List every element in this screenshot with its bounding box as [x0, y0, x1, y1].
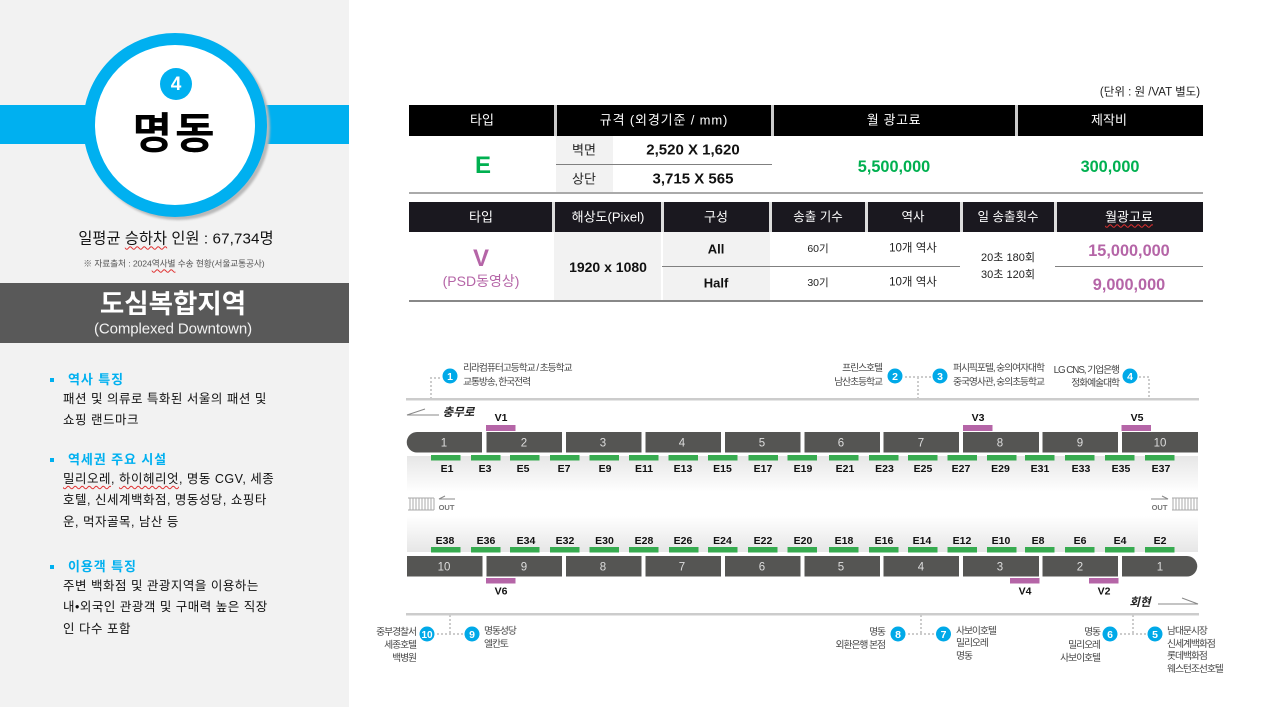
fee all: 15,000,000 — [1088, 242, 1170, 260]
bottom E panels: E14 — [913, 535, 931, 547]
top V panels — [486, 412, 1151, 431]
label cells — [556, 136, 613, 192]
header: size: 규격 (외경기준 / mm) — [600, 112, 728, 128]
OUT sign right — [1151, 496, 1198, 512]
top train doors: 6 — [838, 438, 844, 450]
header dividers — [552, 202, 555, 232]
bullet — [50, 458, 54, 462]
top E panels — [431, 455, 1174, 475]
OUT sign left: OUT — [439, 503, 455, 512]
exit 9 — [464, 625, 517, 650]
bottom train doors: 2 — [1077, 562, 1083, 574]
body text: 내•외국인 관광객 및 구매력 높은 직장 — [63, 600, 268, 614]
bottom train doors: 5 — [838, 562, 844, 574]
top E panels: E37 — [1152, 463, 1170, 475]
top E panels: E15 — [713, 463, 732, 475]
top train doors: 7 — [918, 438, 924, 450]
top train doors: 4 — [679, 438, 686, 450]
exit 8: 명동 — [869, 626, 886, 638]
station circle badge — [83, 33, 267, 217]
header: configuration: 구성 — [704, 210, 728, 224]
top E panels: E27 — [952, 463, 970, 475]
body text: 호텔, 신세계백화점, 명동성당, 쇼핑타 — [63, 493, 267, 507]
top E panels: E33 — [1072, 463, 1090, 475]
header: units: 송출 기수 — [793, 210, 843, 224]
line band — [0, 105, 349, 144]
body text: 주변 백화점 및 관광지역을 이용하는 — [63, 579, 259, 593]
stations all: 10개 역사 — [889, 242, 937, 254]
bottom E panels: E34 — [517, 535, 535, 547]
exit 7: 사보이호텔 — [956, 625, 997, 637]
top V panels: V1 — [495, 412, 508, 424]
monthly fee value: 5,500,000 — [858, 158, 930, 176]
daily plays value — [981, 252, 1035, 281]
exit 10: 세종호텔 — [384, 639, 417, 651]
bullet — [50, 565, 54, 569]
type V note: (PSD동영상) — [443, 273, 519, 289]
All: All — [708, 242, 724, 256]
exit 5: 5 — [1152, 629, 1158, 641]
top V panels: V5 — [1131, 412, 1144, 424]
top E panels: E7 — [558, 463, 571, 475]
exit 6: 밀리오레 — [1068, 639, 1100, 651]
bottom E panels: E24 — [713, 535, 732, 547]
bottom train doors: 8 — [600, 562, 606, 574]
exit 5: 롯데백화점 — [1167, 650, 1207, 662]
bottom train doors: 10 — [438, 562, 450, 574]
exit 5: 남대문시장 — [1167, 625, 1208, 637]
exit 6: 명동 — [1084, 626, 1101, 638]
bottom E panels: E12 — [953, 535, 971, 547]
top E panels: E21 — [836, 463, 854, 475]
bullet — [50, 378, 54, 382]
header: stations: 역사 — [901, 210, 925, 224]
exit 7: 밀리오레 — [956, 637, 988, 649]
top E panels: E17 — [754, 463, 772, 475]
top E panels: E1 — [441, 463, 454, 475]
exit 3: 퍼시픽포텔, 숭의여자대학 — [953, 362, 1045, 374]
production cost value: 300,000 — [1081, 158, 1139, 176]
header bar — [409, 202, 1203, 232]
exit 6 — [1060, 626, 1118, 664]
body text: 인 다수 포함 — [63, 622, 131, 636]
bottom V panels: V2 — [1098, 586, 1111, 598]
exit 9: 9 — [469, 629, 475, 641]
exit 5 — [1148, 625, 1224, 675]
area type title: 도심복합지역 — [100, 289, 246, 319]
exit 1: 리라컴퓨터고등학교 / 초등학교 — [463, 362, 573, 374]
bottom E panels: E22 — [754, 535, 772, 547]
bottom E panels: E8 — [1032, 535, 1045, 547]
top E panels: E19 — [794, 463, 812, 475]
exit 7 — [936, 625, 997, 662]
bottom rule — [409, 300, 1203, 302]
bottom V panels: V6 — [495, 586, 508, 598]
row divider — [662, 266, 960, 267]
exit 8: 외환은행 본점 — [836, 639, 885, 651]
top E panels: E31 — [1031, 463, 1049, 475]
top E panels: E9 — [599, 463, 612, 475]
bottom train doors: 4 — [918, 562, 925, 574]
section: customer traits — [50, 559, 268, 636]
bottom E panels: E36 — [477, 535, 495, 547]
body text: 패션 및 의류로 특화된 서울의 패션 및 — [63, 392, 267, 406]
platform floor shading — [407, 456, 1198, 552]
bottom E panels: E16 — [875, 535, 893, 547]
direction: Hoehyeon — [1129, 596, 1198, 609]
top train doors: 10 — [1154, 438, 1166, 450]
exit 10: 백병원 — [392, 652, 416, 664]
body text: 밀리오레, 하이헤리엇, 명동 CGV, 세종 — [63, 472, 274, 486]
top train doors: 2 — [521, 438, 527, 450]
units half: 30기 — [807, 277, 829, 289]
source note: ※ 자료출처 : 2024역사별 수송 현황(서울교통공사) — [83, 259, 265, 269]
bottom E panels: E10 — [992, 535, 1010, 547]
bottom E panels: E26 — [674, 535, 692, 547]
top E panels: E23 — [875, 463, 894, 475]
bottom E panels: E2 — [1154, 535, 1167, 547]
header: monthly fee: 월광고료 — [1105, 210, 1153, 224]
exit 9: 엘칸토 — [484, 638, 509, 650]
bottom train doors: 7 — [679, 562, 685, 574]
section: station history — [50, 372, 267, 427]
exit 1 — [442, 362, 573, 388]
exit 6: 사보이호텔 — [1060, 652, 1101, 664]
top size: 3,715 X 565 — [653, 170, 733, 188]
bottom train doors — [407, 556, 1197, 576]
top train doors — [407, 432, 1198, 452]
top E panels: E3 — [479, 463, 492, 475]
section: major facilities — [50, 452, 274, 529]
resolution value: 1920 x 1080 — [569, 259, 647, 275]
bottom train doors: 9 — [521, 562, 527, 574]
bottom train doors: 6 — [759, 562, 765, 574]
bottom E panels: E38 — [436, 535, 454, 547]
exit 6: 6 — [1107, 629, 1113, 641]
area type subtitle: (Complexed Downtown) — [94, 320, 252, 338]
exit 4: 정화예술대학 — [1071, 377, 1120, 389]
wall size: 2,520 X 1,620 — [646, 142, 740, 158]
body text: 운, 먹자골목, 남산 등 — [63, 515, 179, 529]
exit 2: 프린스호텔 — [842, 362, 883, 374]
units all: 60기 — [807, 243, 829, 255]
top E panels: E29 — [991, 463, 1010, 475]
header: type: 타입 — [470, 112, 494, 128]
stations half: 10개 역사 — [889, 276, 937, 288]
top V panels: V3 — [972, 412, 985, 424]
heading: 역세권 주요 시설 — [68, 452, 167, 467]
body text — [63, 392, 267, 427]
top E panels: E5 — [517, 463, 530, 475]
top E panels: E35 — [1112, 463, 1130, 475]
heading: 역사 특징 — [68, 372, 124, 387]
exit 8: 8 — [895, 629, 901, 641]
Half: Half — [704, 276, 728, 290]
exit 3: 중국영사관, 숭의초등학교 — [953, 376, 1045, 388]
OUT sign left — [408, 496, 455, 512]
table: E type — [409, 105, 1203, 194]
exit 8 — [836, 626, 906, 651]
bottom E panels: E18 — [835, 535, 853, 547]
station name: 명동 — [132, 110, 218, 158]
header dividers — [554, 105, 557, 136]
bottom train doors: 1 — [1157, 562, 1163, 574]
type E: E — [475, 152, 491, 179]
fee half: 9,000,000 — [1093, 276, 1165, 294]
fee row divider — [1055, 266, 1203, 267]
direction: Hoehyeon: 회현 — [1129, 596, 1152, 609]
bottom E panels: E20 — [794, 535, 812, 547]
panel: station sidebar — [0, 0, 349, 707]
building edge lines and leader dots — [406, 377, 1199, 634]
exit 10: 10 — [421, 630, 433, 641]
header: resolution: 해상도(Pixel) — [572, 210, 644, 224]
top train doors: 5 — [759, 438, 765, 450]
exit 2: 남산초등학교 — [834, 376, 883, 388]
body text — [63, 579, 268, 636]
header: daily plays: 일 송출횟수 — [978, 210, 1038, 224]
exit 10: 중부경찰서 — [376, 625, 416, 638]
heading: 이용객 특징 — [68, 559, 137, 574]
exit 3 — [932, 362, 1045, 388]
line number badge — [160, 68, 192, 100]
header bar — [409, 105, 1203, 136]
body text — [63, 472, 274, 529]
top E panels: E11 — [635, 463, 653, 475]
configuration cell — [663, 232, 770, 300]
body text: 쇼핑 랜드마크 — [63, 413, 139, 427]
exit 9: 명동성당 — [484, 625, 517, 637]
exit 2: 2 — [892, 371, 898, 383]
wall label: 벽면 — [572, 142, 596, 158]
top E panels: E25 — [914, 463, 932, 475]
bottom E panels: E30 — [595, 535, 614, 547]
bottom rule — [409, 192, 1203, 194]
exit 4: 4 — [1127, 371, 1133, 383]
exit 7: 명동 — [956, 650, 973, 662]
bottom V panels: V4 — [1019, 586, 1032, 598]
bottom E panels: E4 — [1114, 535, 1127, 547]
top train doors: 8 — [997, 438, 1003, 450]
exit 7: 7 — [941, 629, 947, 641]
header: monthly fee: 월 광고료 — [867, 112, 921, 128]
row divider — [556, 164, 772, 165]
exit 10 — [376, 625, 434, 664]
table: V type — [409, 202, 1203, 302]
top train doors: 1 — [441, 438, 447, 450]
daily plays value: 20초 180회 — [981, 252, 1035, 264]
bottom train doors: 3 — [997, 562, 1003, 574]
area type banner — [0, 283, 349, 343]
top train doors: 9 — [1077, 438, 1083, 450]
bottom E panels: E6 — [1074, 535, 1087, 547]
top train doors: 3 — [600, 438, 606, 450]
unit note: (단위 : 원 /VAT 별도) — [1100, 86, 1200, 98]
daily plays value: 30초 120회 — [981, 269, 1035, 281]
exit 5: 웨스턴조선호텔 — [1167, 663, 1224, 675]
exit 1: 1 — [447, 371, 453, 383]
exit 4 — [1054, 363, 1138, 389]
bottom V panels — [486, 578, 1118, 598]
bottom E panels: E28 — [635, 535, 653, 547]
exit 1: 교통방송, 한국전력 — [463, 376, 530, 388]
direction: Chungmuro — [407, 406, 476, 419]
top label: 상단 — [572, 172, 596, 186]
top E panels: E13 — [674, 463, 692, 475]
header: production cost: 제작비 — [1091, 112, 1127, 128]
type V: V — [473, 245, 489, 272]
line number badge: 4 — [171, 74, 181, 95]
direction: Chungmuro: 충무로 — [443, 406, 476, 419]
exit 5: 신세계백화점 — [1167, 638, 1215, 650]
exit 4: LG CNS, 기업은행 — [1054, 363, 1119, 376]
bottom E panels: E32 — [556, 535, 574, 547]
resolution cell — [554, 232, 661, 300]
daily passengers: 일평균 승하차 인원 : 67,734명 — [78, 230, 274, 247]
bottom E panels — [431, 535, 1174, 552]
OUT sign right: OUT — [1152, 503, 1168, 512]
exit 2 — [834, 362, 902, 388]
exit 3: 3 — [937, 371, 943, 383]
header: type: 타입 — [469, 210, 493, 224]
